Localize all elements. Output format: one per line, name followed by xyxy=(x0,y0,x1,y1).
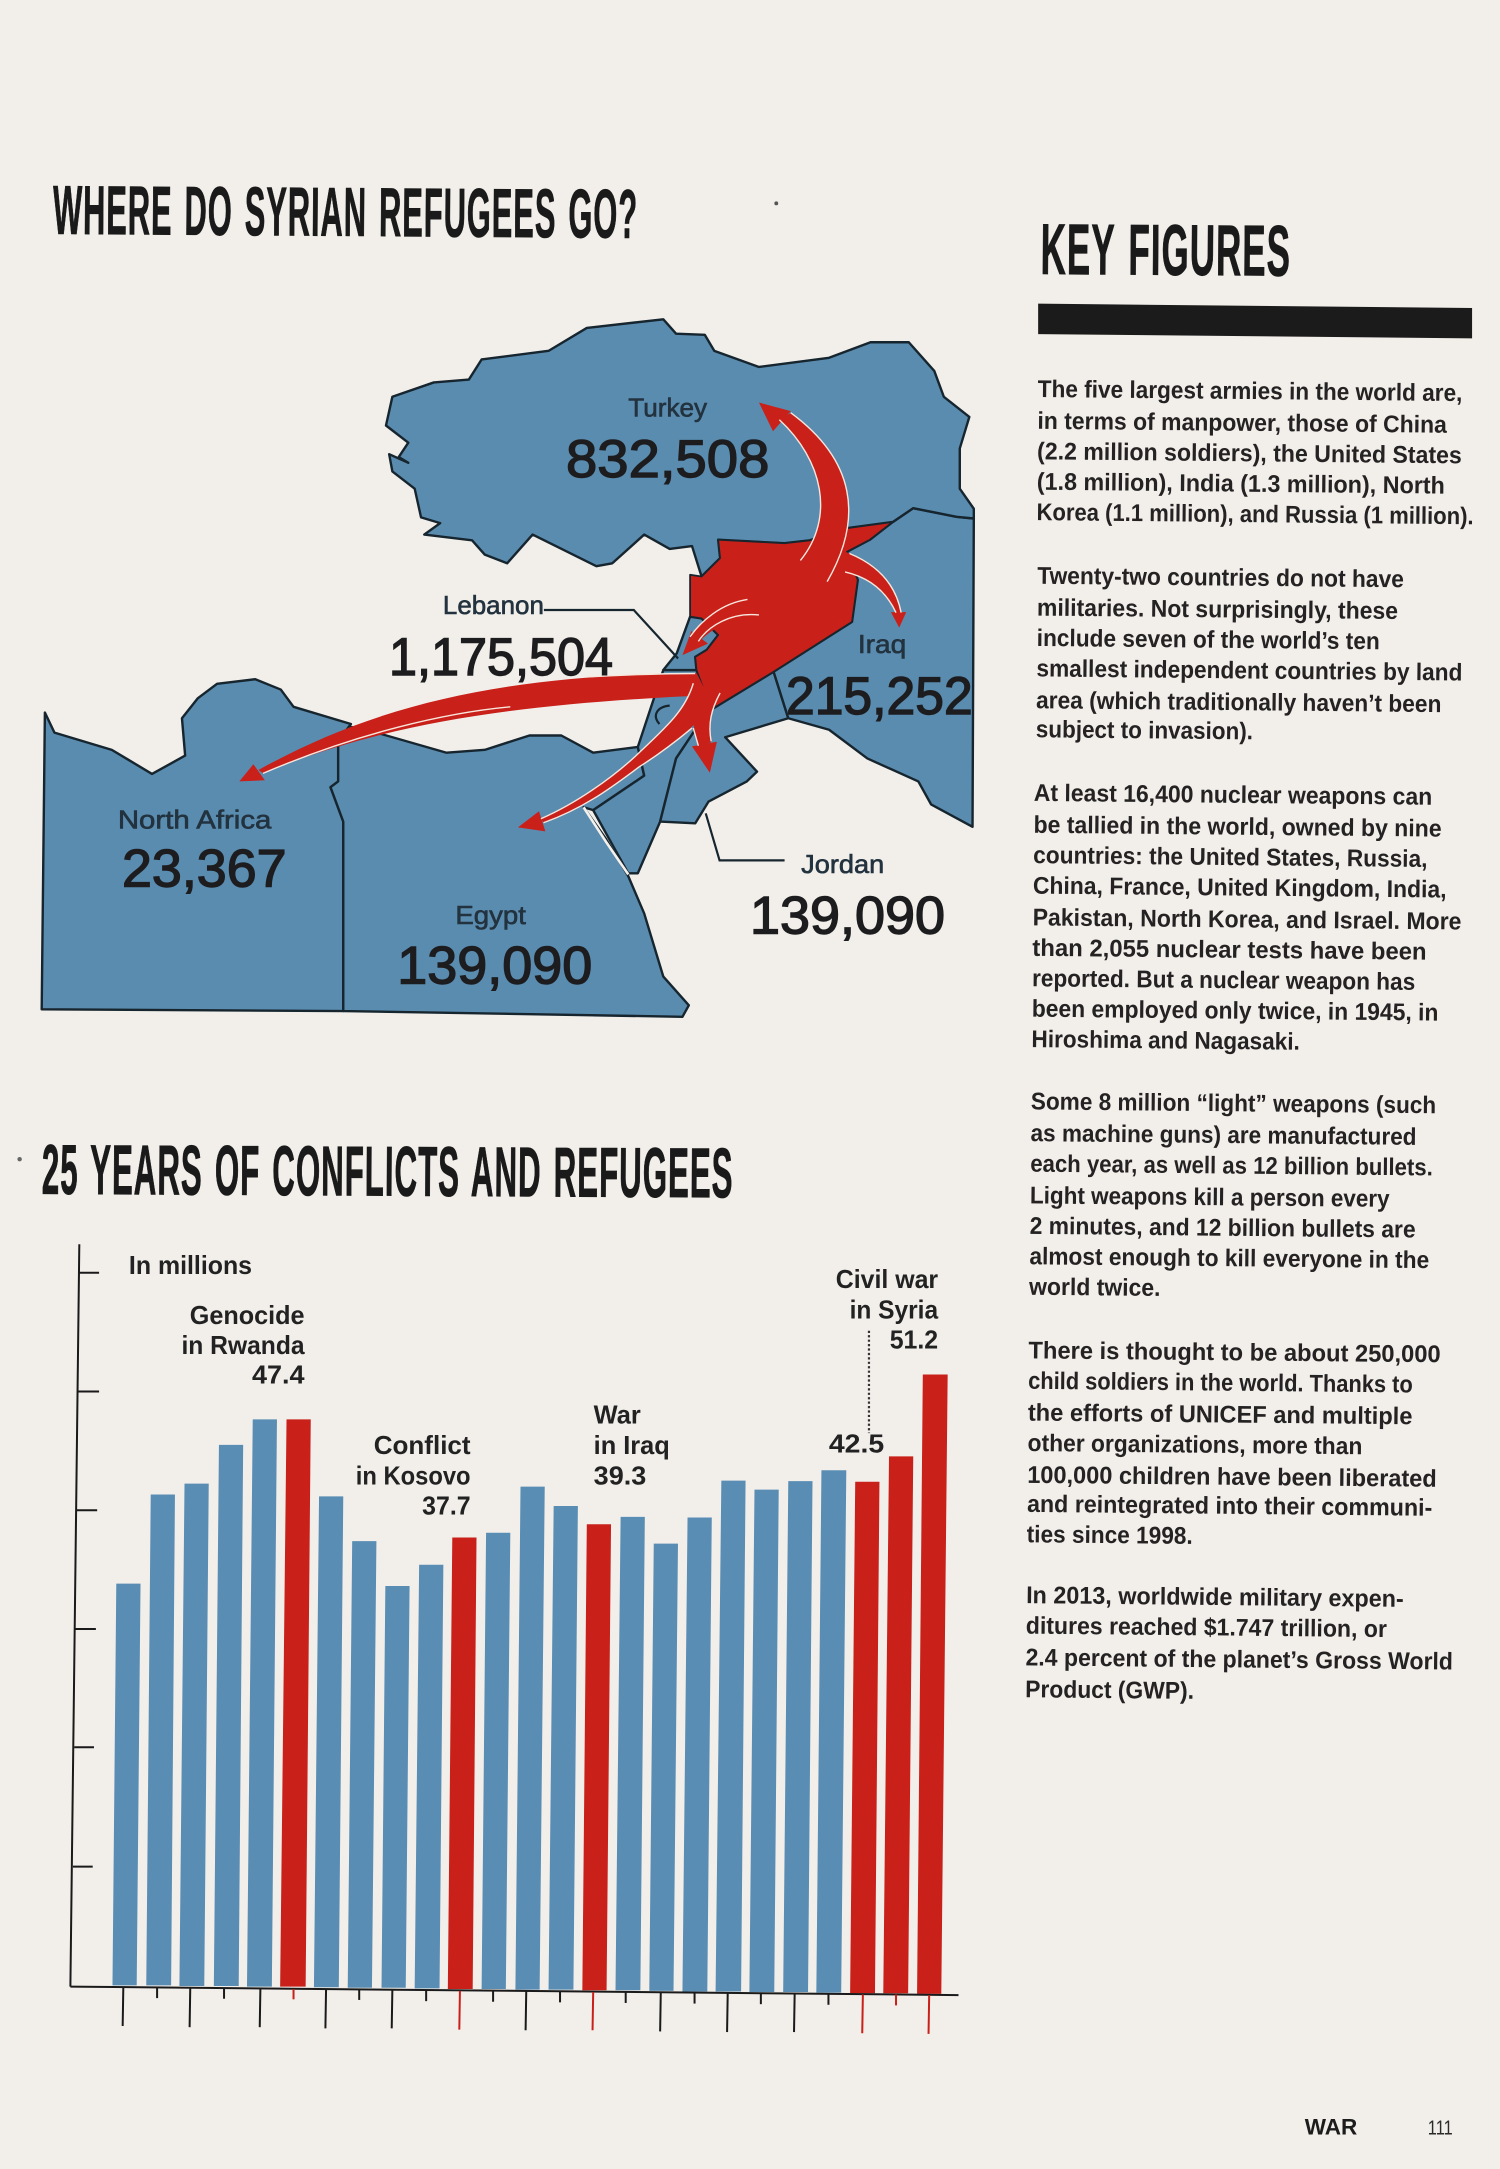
annotation: Rwanda xyxy=(181,1300,305,1389)
paragraph: light weapons: Light weapons kill a person every xyxy=(1030,1182,1390,1213)
paragraph: no militaries: subject to invasion). xyxy=(1036,716,1253,745)
paragraph: light weapons: each year, as well as 12 billion bullets. xyxy=(1030,1151,1433,1181)
value: North Africa: 23,367 xyxy=(122,840,287,899)
black rule xyxy=(1038,304,1472,338)
y axis xyxy=(70,1244,99,1987)
value: Egypt: 139,090 xyxy=(397,937,592,996)
annotation: Iraq: 39.3 xyxy=(594,1460,646,1490)
paragraph: armies: The five largest armies in the world are, xyxy=(1038,376,1463,407)
paragraph: nuclear weapons: than 2,055 nuclear tests have been xyxy=(1032,935,1427,966)
label: Egypt: Egypt xyxy=(455,900,527,930)
paragraph: light weapons: Some 8 million “light” weapons (such xyxy=(1031,1088,1436,1119)
country: North Africa xyxy=(42,679,351,1011)
value: Turkey: 832,508 xyxy=(566,430,769,489)
paragraph: armies: in terms of manpower, those of China xyxy=(1037,408,1447,439)
paragraph: child soldiers xyxy=(1027,1337,1441,1552)
annotation: 42.5 value: 42.5 xyxy=(829,1428,884,1458)
country: Iraq xyxy=(774,508,974,827)
paragraph: child soldiers: and reintegrated into their communi- xyxy=(1027,1491,1432,1522)
country: Jordan xyxy=(660,672,788,823)
gulf highlight xyxy=(584,807,628,874)
annotation: Kosovo: Conflict xyxy=(374,1430,471,1460)
body text xyxy=(1024,376,1475,1707)
paragraph: light weapons: 2 minutes, and 12 billion bullets are xyxy=(1030,1213,1416,1244)
paragraph: no militaries xyxy=(1036,563,1463,747)
paragraph: child soldiers: 100,000 children have been liberated xyxy=(1027,1462,1437,1493)
map shapes xyxy=(42,319,974,1017)
paragraph: nuclear weapons: be tallied in the world, owned by nine xyxy=(1033,812,1442,843)
leader line: Jordan xyxy=(706,813,785,860)
paragraph: military expenditures xyxy=(1025,1582,1454,1707)
annotation: Syria xyxy=(836,1264,938,1355)
arrow: to Jordan xyxy=(692,693,720,773)
value: Iraq: 215,252 xyxy=(786,667,973,726)
label: Jordan: Jordan xyxy=(801,849,884,879)
country: Israel and Sinai area xyxy=(593,670,711,873)
paragraph: no militaries: include seven of the world’s ten xyxy=(1037,625,1380,655)
paragraph: light weapons xyxy=(1028,1088,1436,1305)
paragraph: child soldiers: child soldiers in the world. Thanks to xyxy=(1028,1368,1413,1398)
annotation: Iraq xyxy=(594,1399,670,1490)
paragraph: military expenditures: ditures reached $1.747 trillion, or xyxy=(1026,1613,1388,1643)
paragraph: armies xyxy=(1036,376,1475,530)
red bars: major conflicts xyxy=(280,1375,948,1994)
x axis xyxy=(70,1987,959,2034)
arrow: to North Africa xyxy=(239,673,708,781)
paragraph: no militaries: smallest independent countries by land xyxy=(1036,655,1463,687)
arrow: to Iraq xyxy=(845,552,906,628)
unit label: In millions xyxy=(129,1250,252,1280)
annotation: Rwanda: in Rwanda xyxy=(181,1330,305,1360)
annotation: Rwanda: Genocide xyxy=(190,1300,305,1330)
paragraph: no militaries: militaries. Not surprisingly, these xyxy=(1037,595,1398,625)
paragraph: child soldiers: other organizations, more than xyxy=(1027,1430,1362,1460)
annotation: Syria: 51.2 xyxy=(890,1325,938,1355)
annotation: Iraq: in Iraq xyxy=(594,1430,670,1460)
paragraph: nuclear weapons: countries: the United States, Russia, xyxy=(1033,842,1428,873)
annotation: Syria: Civil war xyxy=(836,1264,938,1294)
value: Lebanon: 1,175,504 xyxy=(389,628,613,687)
annotation: Iraq: War xyxy=(594,1399,641,1429)
country: Egypt xyxy=(331,727,689,1017)
chart graphics xyxy=(70,1244,959,2034)
paragraph: light weapons: world twice. xyxy=(1028,1274,1161,1302)
blue bars: other years xyxy=(112,1419,846,1993)
annotation: Kosovo: in Kosovo xyxy=(356,1460,471,1490)
paragraph: armies: (1.8 million), India (1.3 million), North xyxy=(1037,469,1445,500)
paragraph: nuclear weapons xyxy=(1031,780,1463,1057)
annotation: Kosovo xyxy=(356,1430,471,1521)
paragraph: nuclear weapons: At least 16,400 nuclear weapons can xyxy=(1034,780,1432,811)
paragraph: nuclear weapons: been employed only twice, in 1945, in xyxy=(1032,996,1439,1027)
paragraph: no militaries: Twenty-two countries do not have xyxy=(1037,563,1404,593)
annotation: Syria: in Syria xyxy=(850,1294,938,1324)
label: Turkey: Turkey xyxy=(628,392,708,422)
arrow: to Egypt xyxy=(518,683,720,831)
annotation: Kosovo: 37.7 xyxy=(422,1491,471,1521)
value: Jordan: 139,090 xyxy=(750,887,945,946)
footer: section name: WAR xyxy=(1305,2114,1357,2139)
paragraph: military expenditures: Product (GWP). xyxy=(1025,1676,1194,1705)
paragraph: military expenditures: 2.4 percent of the planet’s Gross World xyxy=(1025,1644,1453,1676)
country: Turkey xyxy=(386,319,974,576)
paragraph: armies: (2.2 million soldiers), the United States xyxy=(1037,438,1462,469)
annotation: Rwanda: 47.4 xyxy=(252,1359,305,1389)
text: WHERE DO SYRIAN REFUGEES GO? xyxy=(53,171,638,253)
dotted leader xyxy=(868,1331,870,1433)
paragraph: child soldiers: ties since 1998. xyxy=(1027,1521,1193,1550)
label: North Africa: North Africa xyxy=(118,805,272,835)
paragraph: nuclear weapons: Hiroshima and Nagasaki. xyxy=(1031,1026,1300,1056)
paragraph: light weapons: almost enough to kill everyone in the xyxy=(1029,1243,1429,1274)
paragraph: no militaries: area (which traditionally haven’t been xyxy=(1036,687,1442,718)
paragraph: child soldiers: the efforts of UNICEF and multiple xyxy=(1028,1400,1413,1430)
lake outline xyxy=(656,706,670,724)
paragraph: nuclear weapons: reported. But a nuclear weapon has xyxy=(1032,965,1415,996)
country: Lebanon xyxy=(663,617,718,670)
country: Syria xyxy=(690,522,893,710)
leader line: Lebanon xyxy=(544,610,678,658)
paragraph: military expenditures: In 2013, worldwide military expen- xyxy=(1026,1582,1404,1613)
arrow: to Turkey xyxy=(759,403,849,582)
panel: key figures xyxy=(1024,210,1475,1707)
footer: page number: 111 xyxy=(1428,2116,1453,2139)
map: refugee destinations xyxy=(42,319,974,1017)
paragraph: nuclear weapons: Pakistan, North Korea, and Israel. More xyxy=(1033,904,1462,936)
label: Iraq: Iraq xyxy=(858,629,906,659)
paragraph: nuclear weapons: China, France, United Kingdom, India, xyxy=(1033,873,1447,904)
arrow: to Lebanon xyxy=(682,599,759,655)
paragraph: light weapons: as machine guns) are manufactured xyxy=(1030,1120,1417,1151)
paragraph: child soldiers: There is thought to be about 250,000 xyxy=(1028,1337,1441,1368)
label: Lebanon: Lebanon xyxy=(443,590,544,620)
bar chart: refugees in millions xyxy=(70,1244,959,2034)
